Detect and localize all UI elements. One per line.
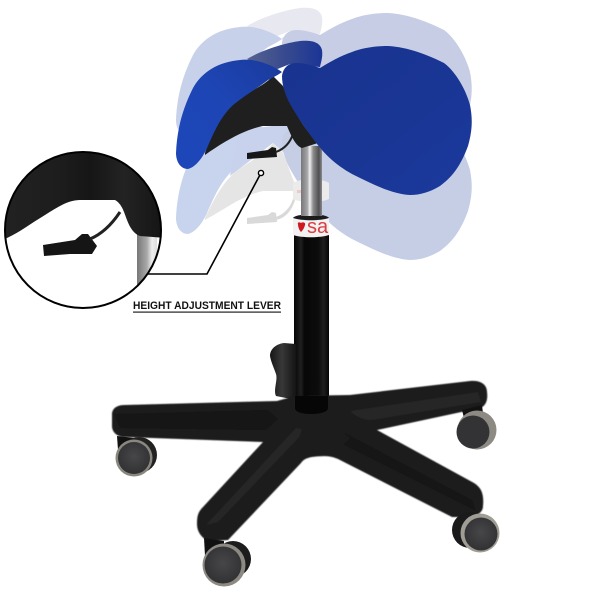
- caster: right rear: [456, 405, 496, 450]
- seat: left wing: [176, 60, 282, 169]
- base highlights: [350, 392, 481, 420]
- label: height adjustment lever: HEIGHT ADJUSTMENT LEVER: [133, 300, 281, 312]
- chrome rod: [301, 146, 322, 216]
- base: back arm: [270, 343, 296, 400]
- caster: front left: [202, 538, 251, 586]
- seat: right wing: [282, 46, 472, 195]
- column collar: logo ring: [293, 214, 329, 238]
- leader line to lever: [148, 170, 264, 274]
- ghost: lowered collar: [293, 179, 329, 202]
- caster: front right: [452, 512, 500, 552]
- ghost: lowered lever: [247, 199, 295, 224]
- inset rod: [137, 234, 157, 285]
- ghost: seat lowered position: [176, 111, 472, 260]
- inset bracket: [6, 153, 160, 238]
- bracket: black seat mount: [205, 76, 318, 155]
- ghost: lowered bracket: [205, 143, 296, 220]
- column collar: logo ring: sa: [307, 216, 329, 238]
- callout: magnified lever detail: [4, 151, 162, 309]
- base: five-star base: [112, 381, 487, 541]
- lever: height adjustment: [247, 134, 293, 159]
- ghost: seat raised position: [176, 8, 472, 162]
- infographic: saddle stool with height adjustment lever: [4, 8, 500, 586]
- caster: left rear: [116, 436, 157, 476]
- column: black gas cylinder: [294, 234, 329, 410]
- column foot over base: [295, 396, 328, 414]
- seat: back edge: [247, 41, 322, 72]
- inset lever: [43, 234, 97, 256]
